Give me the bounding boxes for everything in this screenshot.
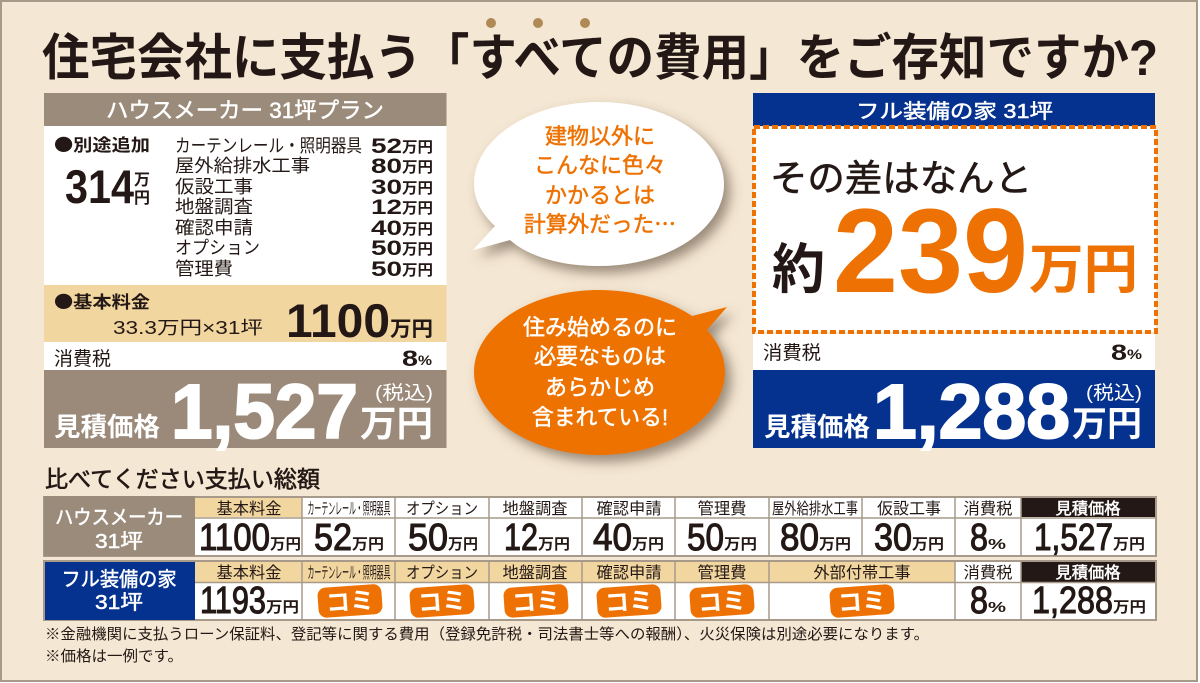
extras item list: カーテンレール・照明器具 [175, 136, 362, 156]
footnotes [45, 625, 929, 665]
extras amounts: 万円 [402, 221, 433, 238]
estimate price: full equipment: 見積価格 [764, 412, 870, 442]
included badges: コミ [697, 587, 747, 618]
column headers [216, 500, 1120, 518]
column headers: 地盤調査 [502, 500, 568, 518]
speech bubble: white [473, 102, 724, 266]
cell values: 50 [687, 517, 724, 559]
consumption tax row [44, 342, 446, 371]
included badges [317, 584, 895, 618]
column headers: 地盤調査 [502, 564, 568, 582]
extras item list: 仮設工事 [175, 177, 253, 197]
base fee band [44, 285, 446, 347]
panel header: full equipment: フル装備の家 31坪 [856, 100, 1053, 123]
cell values: 万円 [448, 536, 478, 553]
cell values: 万円 [266, 599, 299, 616]
estimate price: full equipment: 万円 [1072, 405, 1142, 444]
cell values: 30 [874, 517, 912, 559]
extras heading: ●別途追加 [54, 131, 150, 156]
base fee band: 33.3万円×31坪 [113, 318, 263, 338]
cell values: 万円 [724, 536, 757, 553]
column headers: 見積価格 [1056, 500, 1120, 518]
panel: house maker plan [44, 93, 446, 455]
cell values: 万円 [270, 536, 301, 553]
included badges: コミ [837, 587, 887, 618]
extras item list: 確認申請 [175, 218, 253, 238]
column headers: 消費税 [964, 564, 1012, 582]
estimate price: house maker: 見積価格 [54, 412, 160, 442]
column headers: オプション [406, 564, 478, 582]
extras amounts: 万円 [402, 139, 433, 156]
cell values: 万円 [1113, 599, 1146, 616]
speech bubble: white: 計算外だった… [524, 207, 676, 239]
cell values: 万円 [352, 536, 384, 553]
cell values: 52 [314, 517, 352, 559]
extras amounts: 30 [371, 176, 402, 199]
extras amounts: 50 [371, 258, 402, 281]
column headers: 見積価格 [1056, 564, 1120, 582]
estimate price: house maker: 1,527 [171, 369, 358, 455]
consumption tax row: % [418, 352, 433, 368]
speech bubble: white: 建物以外に [545, 124, 655, 149]
row label: house maker [44, 496, 195, 556]
estimate price: full equipment [753, 369, 1155, 455]
extras total: 万 [134, 172, 150, 189]
extras amounts [371, 135, 433, 281]
estimate price: house maker: (税込) [375, 382, 433, 404]
extras total: 314 [65, 160, 134, 213]
panel header: house maker: ハウスメーカー 31坪プラン [106, 98, 384, 123]
difference callout: その差はなんと [770, 158, 1032, 199]
extras amounts: 万円 [402, 180, 433, 197]
speech bubble: white: こんなに色々 [534, 153, 666, 178]
extras amounts: 52 [371, 135, 402, 158]
speech bubble: orange: あらかじめ [545, 375, 655, 400]
speech bubble: orange: 含まれている! [532, 405, 668, 430]
cell values: 1,288 [1032, 580, 1113, 622]
extras amounts: 万円 [402, 241, 433, 258]
extras amounts: 40 [371, 217, 402, 240]
column headers: 基本料金 [216, 564, 282, 582]
column headers: 確認申請 [596, 564, 662, 582]
cell values: 1193 [200, 580, 266, 622]
cell values: 万円 [819, 536, 851, 553]
row label: full equipment [45, 562, 195, 620]
column headers: 仮設工事 [877, 500, 941, 518]
cell values: 8 [970, 517, 988, 559]
column headers: 屋外給排水工事 [772, 500, 858, 518]
cell values: % [988, 536, 1006, 553]
speech bubble: orange: 必要なものは [534, 344, 666, 369]
column headers: カーテンレール・照明器具 [308, 500, 390, 518]
extras item list: 地盤調査 [175, 197, 253, 217]
cell values: 万円 [1113, 536, 1145, 553]
estimate price: full equipment: 1,288 [873, 369, 1070, 455]
consumption tax row: 消費税 [763, 342, 821, 364]
cell values: % [988, 599, 1006, 616]
row label: house maker: 31坪 [95, 530, 143, 553]
estimate price: house maker: 万円 [360, 403, 433, 444]
cell values: 40 [593, 517, 632, 559]
extras item list: 管理費 [175, 259, 233, 279]
cell values [200, 580, 1146, 622]
column headers: 管理費 [698, 500, 746, 518]
comparison heading: 比べてください支払い総額 [45, 466, 320, 492]
column headers: 外部付帯工事 [814, 564, 910, 582]
extras amounts: 万円 [402, 159, 433, 176]
cell values: 12 [504, 517, 538, 559]
extras amounts: 万円 [402, 200, 433, 217]
footnotes: ※価格は一例です。 [45, 648, 183, 665]
cell values: 万円 [632, 536, 664, 553]
column headers: 基本料金 [216, 500, 282, 518]
difference callout: 239 [833, 184, 1028, 318]
panel: full equipment house [753, 93, 1156, 455]
column headers: カーテンレール・照明器具 [308, 564, 390, 582]
panel header: house maker [44, 93, 446, 126]
included badges: コミ [417, 587, 467, 618]
cell values: 万円 [912, 536, 944, 553]
cell values: 1,527 [1034, 517, 1113, 559]
extras amounts: 80 [371, 155, 402, 178]
extras item list: 屋外給排水工事 [175, 156, 310, 176]
row label: full equipment: フル装備の家 [62, 568, 176, 591]
speech bubble: white: かかるとは [545, 183, 655, 208]
column headers: 確認申請 [596, 500, 662, 518]
speech bubble: orange: 住み始めるのに [523, 315, 677, 340]
consumption tax row: 8 [1111, 340, 1127, 365]
cell values [199, 517, 1145, 559]
consumption tax row: 消費税 [54, 348, 111, 370]
column headers: 管理費 [698, 564, 746, 582]
cell values: 50 [408, 517, 448, 559]
extras amounts: 50 [371, 237, 402, 260]
comparison table: house maker [44, 496, 1156, 559]
consumption tax row: % [1127, 346, 1143, 362]
row label: full equipment: 31坪 [95, 591, 143, 614]
difference callout: 約 [772, 240, 825, 300]
included badges: コミ [604, 587, 654, 618]
row label: house maker: ハウスメーカー [55, 507, 183, 529]
base fee band: ●基本料金 [54, 288, 150, 313]
footnotes: ※金融機関に支払うローン保証料、登記等に関する費用（登録免許税・司法書士等への報酬）、火災保険は別途必要になります。 [45, 625, 929, 643]
extras total: 円 [134, 190, 150, 207]
extras item list [175, 136, 362, 279]
column headers: オプション [406, 500, 478, 518]
column headers [216, 564, 1120, 582]
included badges: コミ [325, 587, 375, 618]
estimate price: house maker [44, 369, 446, 455]
estimate price: full equipment: (税込) [1086, 382, 1142, 404]
consumption tax row: 8 [402, 346, 418, 371]
base fee band: 万円 [390, 318, 433, 341]
comparison table: full equipment [44, 561, 1156, 622]
column headers: 消費税 [964, 500, 1012, 518]
speech bubble: orange [474, 290, 727, 455]
consumption tax row [753, 334, 1155, 370]
extras amounts: 万円 [402, 262, 433, 279]
cell values: 80 [780, 517, 819, 559]
difference callout [754, 127, 1156, 332]
title: 住宅会社に支払う「すべての費用」をご存知ですか? [42, 30, 1158, 86]
header cell highlights [195, 498, 1155, 517]
cell values: 万円 [538, 536, 570, 553]
estimate header cell [1021, 562, 1155, 582]
extras item list: オプション [175, 238, 260, 258]
base fee band: 1100 [286, 294, 390, 347]
panel header: full equipment [753, 93, 1155, 126]
cell values: 1100 [199, 517, 270, 559]
cell values: 8 [970, 580, 988, 622]
difference callout: 万円 [1029, 240, 1138, 300]
header cell highlights [195, 562, 955, 582]
extras amounts: 12 [371, 196, 402, 219]
included badges: コミ [511, 587, 561, 618]
